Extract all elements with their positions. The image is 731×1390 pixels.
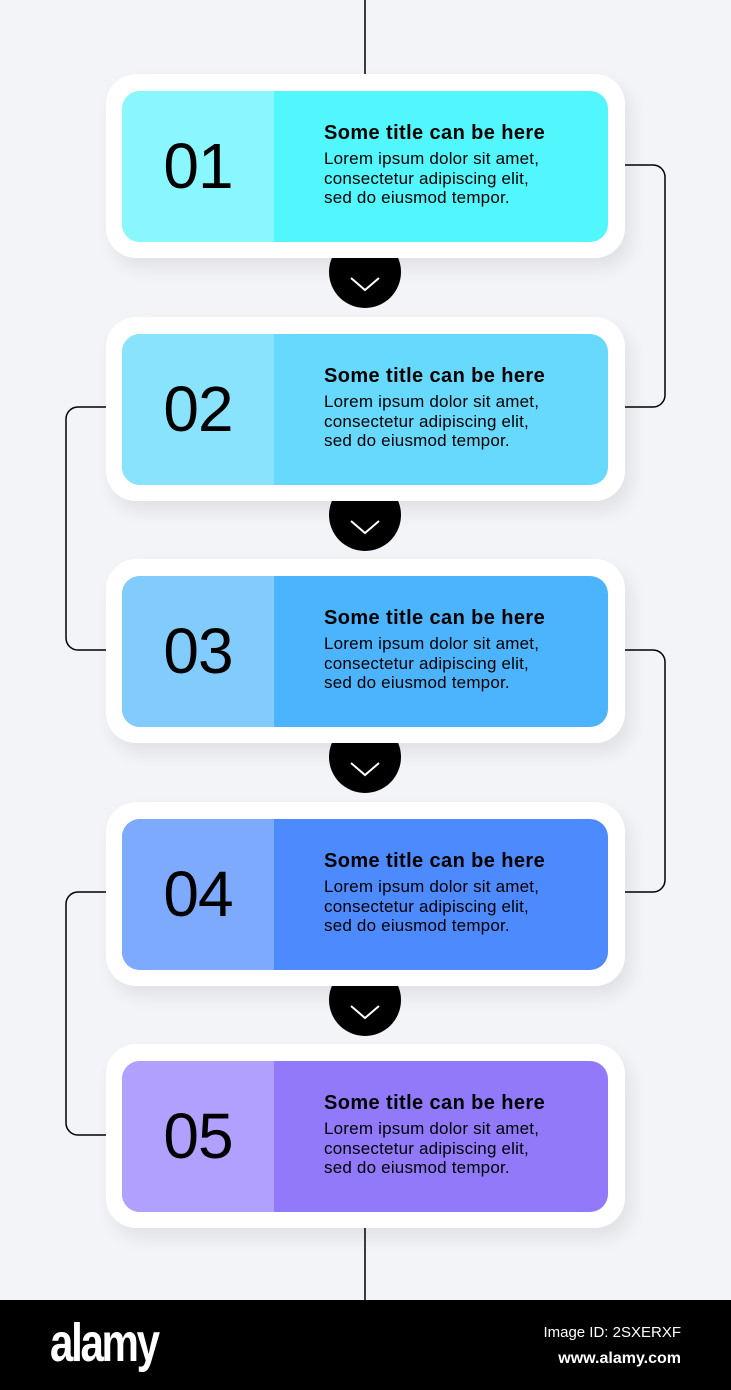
panel: step 03: sed do eiusmod tempor. (324, 673, 510, 692)
panel: step 02: sed do eiusmod tempor. (324, 431, 510, 450)
panel: step 03: Lorem ipsum dolor sit amet, (324, 634, 539, 653)
panel: step 05: 05 (163, 1100, 233, 1172)
panel: step 04: Lorem ipsum dolor sit amet, (324, 877, 539, 896)
panel: step 02 (106, 317, 625, 501)
panel: step 01: consectetur adipiscing elit, (324, 168, 529, 188)
panel: step 03 (106, 559, 625, 743)
panel: step 05: sed do eiusmod tempor. (324, 1158, 510, 1177)
footer logo: alamy (50, 1313, 158, 1373)
panel: step 02: Some title can be here (324, 365, 545, 387)
arrow circle 4 (329, 964, 401, 1036)
arrow circle 3 (329, 721, 401, 793)
panel: step 04: sed do eiusmod tempor. (324, 916, 510, 935)
panel: step 05 (106, 1044, 625, 1228)
panel: step 03: 03 (163, 615, 233, 687)
footer id text: www.alamy.com (558, 1350, 681, 1367)
footer id text: Image ID: 2SXERXF (543, 1324, 681, 1341)
panel: step 05: Some title can be here (324, 1092, 545, 1114)
panel: step 04: Some title can be here (324, 850, 545, 872)
footer (0, 1300, 731, 1390)
panel: step 02: consectetur adipiscing elit, (324, 412, 529, 430)
arrow circle 1 (329, 236, 401, 308)
panel: step 05: consectetur adipiscing elit, (324, 1138, 529, 1158)
panel: step 04 (106, 802, 625, 986)
footer id text (543, 1324, 681, 1367)
panel: step 04: 04 (163, 858, 233, 930)
panel: step 01: 01 (163, 130, 233, 202)
panel: step 01: Lorem ipsum dolor sit amet, (324, 149, 539, 168)
panel: step 02: 02 (163, 373, 233, 445)
panel: step 01: sed do eiusmod tempor. (324, 188, 510, 207)
panel: step 03: consectetur adipiscing elit, (324, 654, 529, 672)
panel: step 03: Some title can be here (324, 607, 545, 629)
panel: step 04: consectetur adipiscing elit, (324, 896, 529, 916)
panel: step 05: Lorem ipsum dolor sit amet, (324, 1119, 539, 1138)
panel: step 01: Some title can be here (324, 122, 545, 144)
arrow circle 2 (329, 479, 401, 551)
panel: step 01 (106, 74, 625, 258)
panel: step 02: Lorem ipsum dolor sit amet, (324, 392, 539, 411)
